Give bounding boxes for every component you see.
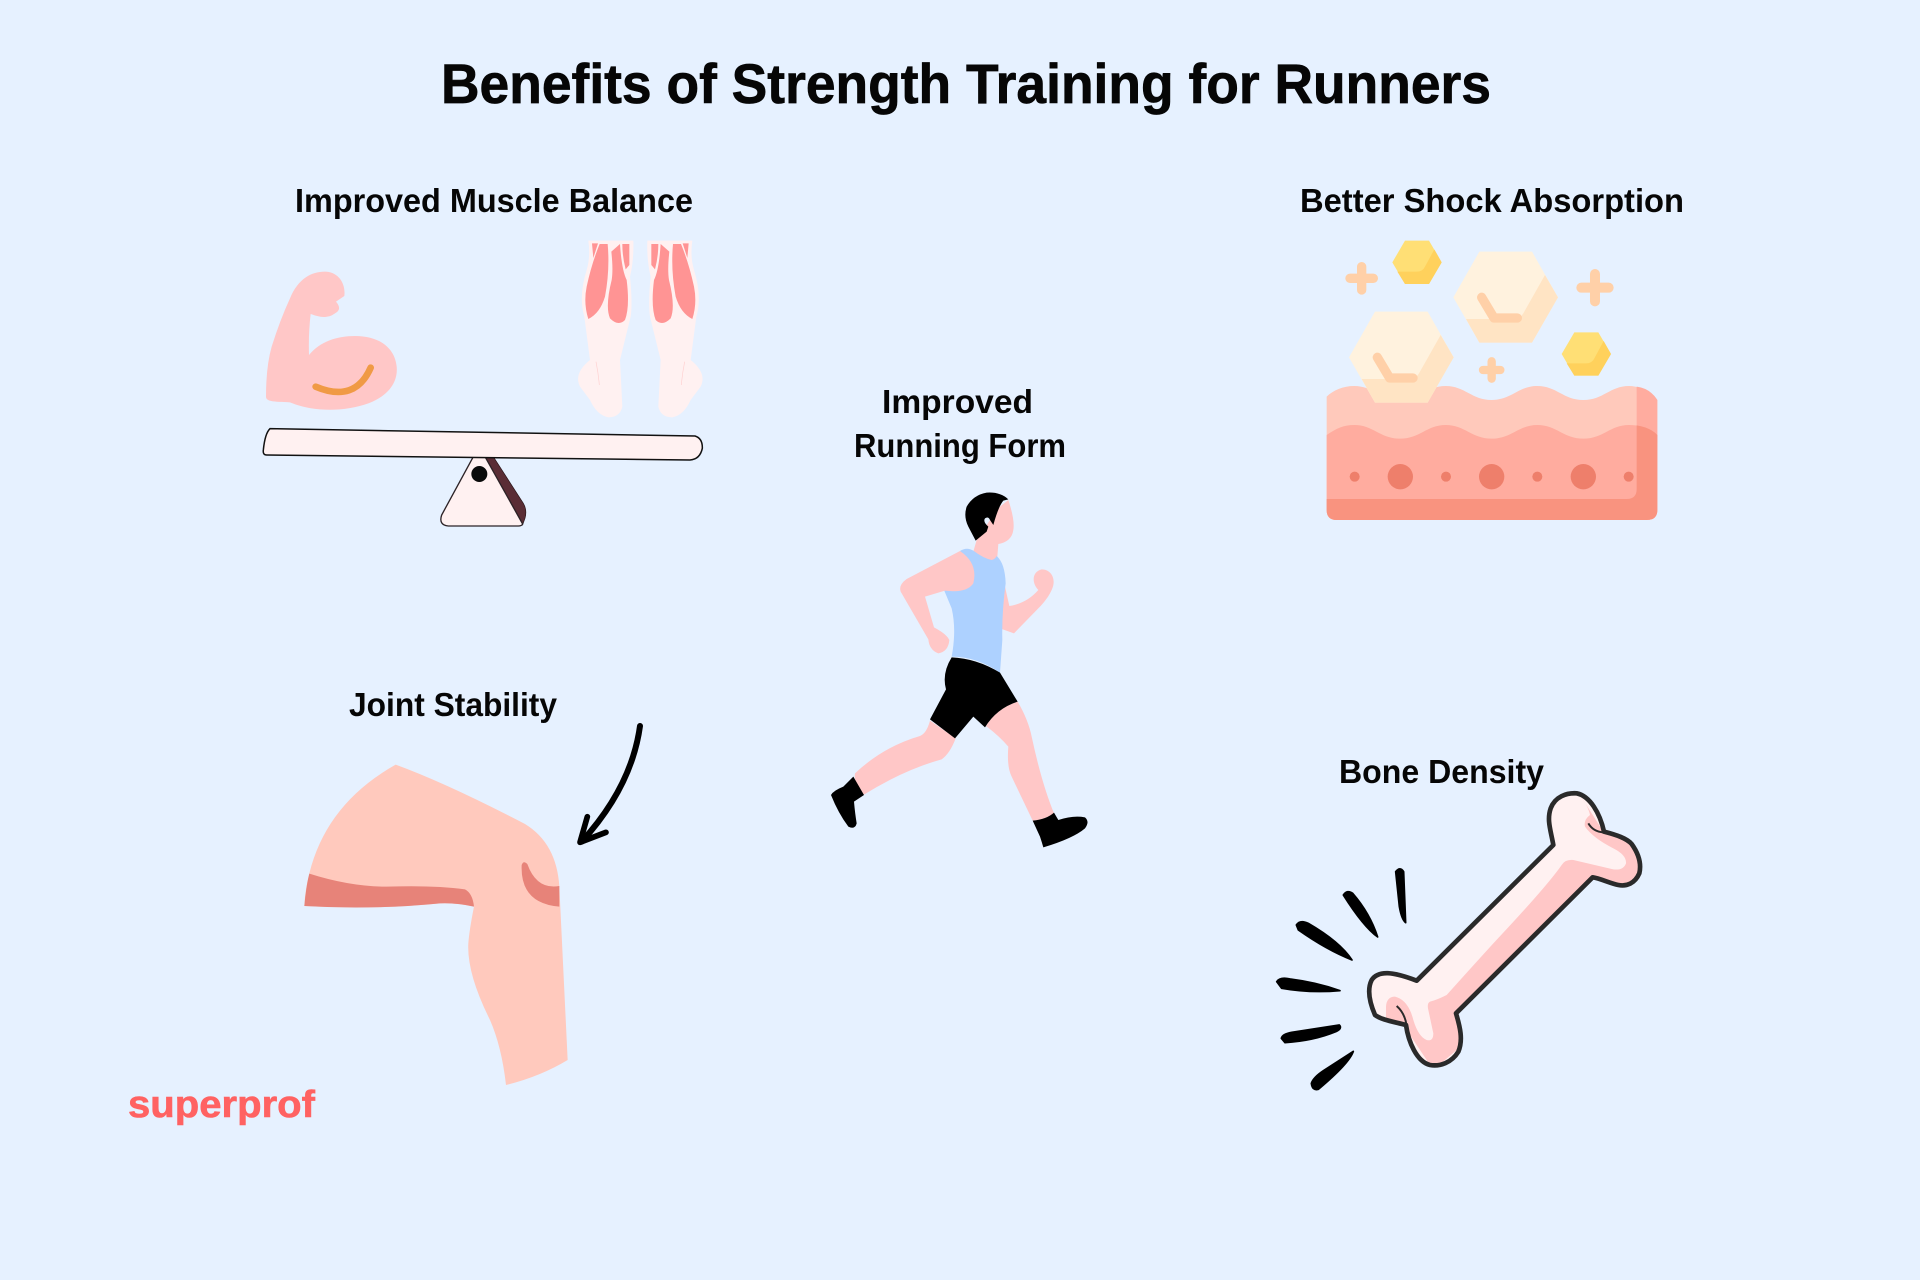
icon: seesaw plank [263,429,702,460]
illustration: runner [831,493,1087,847]
back shoe [831,777,864,828]
heading: joint stability: Joint Stability [349,686,558,723]
hair [965,493,1008,541]
panel: improved muscle balance [263,182,703,526]
icon: bone [1369,793,1643,1070]
icon: impact marks [1277,869,1406,1090]
front shoe [1033,813,1087,847]
icon: small yellow hexagon top [1392,241,1442,284]
heading: improved running form: Improved [882,383,1033,420]
skin layers [1327,386,1657,520]
front leg [986,702,1054,821]
panel: bone density [1277,753,1643,1090]
logo: superprof: superprof [128,1084,315,1126]
icon: small yellow hexagon right [1562,332,1611,376]
illustration: skin layers with collagen hexagons [1327,241,1657,520]
head and neck [972,500,1014,565]
tank top [943,549,1006,673]
title: Benefits of Strength Training for Runners [441,52,1491,115]
heading: better shock absorption: Better Shock Absorption [1300,182,1684,219]
near arm [900,551,974,653]
panel: joint stability [304,686,640,1085]
icon: seesaw fulcrum [441,457,526,526]
illustration: knee and arrow [304,726,640,1085]
panel: improved running form [831,383,1087,847]
panel: better shock absorption [1300,182,1684,520]
back leg [855,721,956,795]
illustration: seesaw with arm and legs [263,241,703,526]
icon: plus signs [1350,267,1609,379]
icon: bent knee [304,765,568,1085]
icon: flexed arm [266,272,397,410]
icon: left calf muscles [578,241,633,417]
heading: improved running form [854,383,1066,464]
illustration: bone with impact marks [1277,793,1643,1090]
heading: improved running form: Running Form [854,427,1066,464]
icon: large cream hexagon left [1349,312,1454,403]
shorts [930,657,1018,738]
far arm [1001,569,1054,633]
heading: bone density: Bone Density [1339,753,1545,790]
icon: large cream hexagon right [1453,252,1558,343]
arrow pointing to knee [580,726,640,842]
icon: right calf muscles [647,241,703,417]
heading: improved muscle balance: Improved Muscle Balance [295,182,693,219]
